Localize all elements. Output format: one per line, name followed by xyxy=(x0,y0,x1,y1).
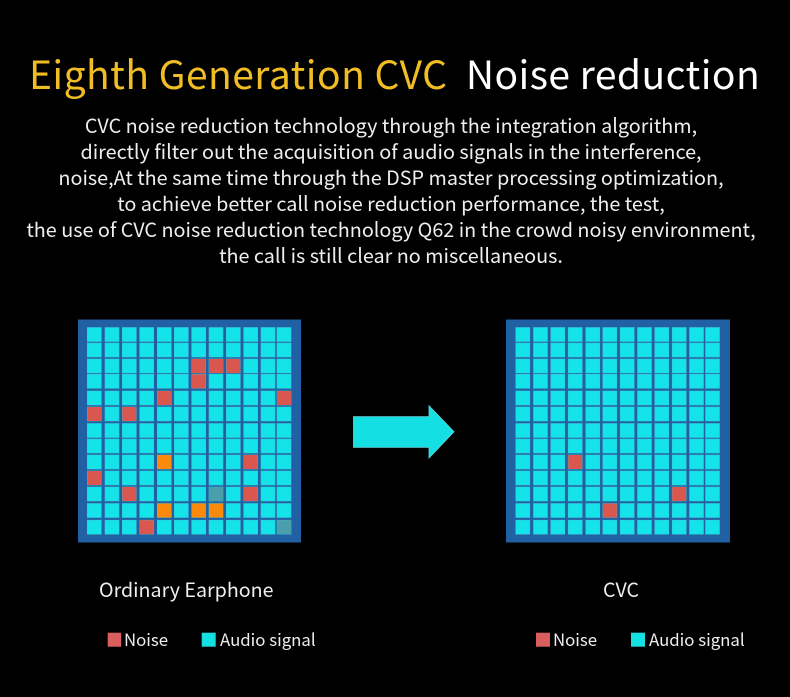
description text: noise,At the same time through the DSP master processing optimization, xyxy=(58,162,724,191)
legend swatch: left audio signal xyxy=(202,633,216,647)
legend swatch: right audio signal xyxy=(631,633,645,647)
description text: directly filter out the acquisition of audio signals in the interference, xyxy=(80,136,702,165)
label: Ordinary Earphone: Ordinary Earphone xyxy=(99,574,274,603)
legend text: left noise: Noise xyxy=(124,627,168,651)
description text: CVC noise reduction technology through the integration algorithm, xyxy=(85,110,697,139)
legend swatch: right noise xyxy=(536,633,550,647)
description text: to achieve better call noise reduction performance, the test, xyxy=(117,188,665,217)
description text: the call is still clear no miscellaneous. xyxy=(219,240,563,269)
description text xyxy=(26,110,756,269)
legend text: left audio signal: Audio signal xyxy=(220,627,316,651)
label: CVC: CVC xyxy=(603,574,639,603)
noise cells: ordinary earphone xyxy=(87,359,291,534)
arrow xyxy=(354,406,454,458)
noise cells: CVC xyxy=(568,455,686,518)
panel: ordinary earphone grid xyxy=(78,320,301,542)
title: Eighth Generation CVC Noise reduction xyxy=(29,45,760,101)
legend text: right audio signal: Audio signal xyxy=(649,627,745,651)
panel: CVC grid xyxy=(506,320,730,542)
legend swatch: left noise xyxy=(108,633,121,647)
orange cells xyxy=(157,455,223,518)
legend text: right noise: Noise xyxy=(553,627,597,651)
description text: the use of CVC noise reduction technology Q62 in the crowd noisy environment, xyxy=(26,214,756,243)
muted cells xyxy=(209,487,291,534)
